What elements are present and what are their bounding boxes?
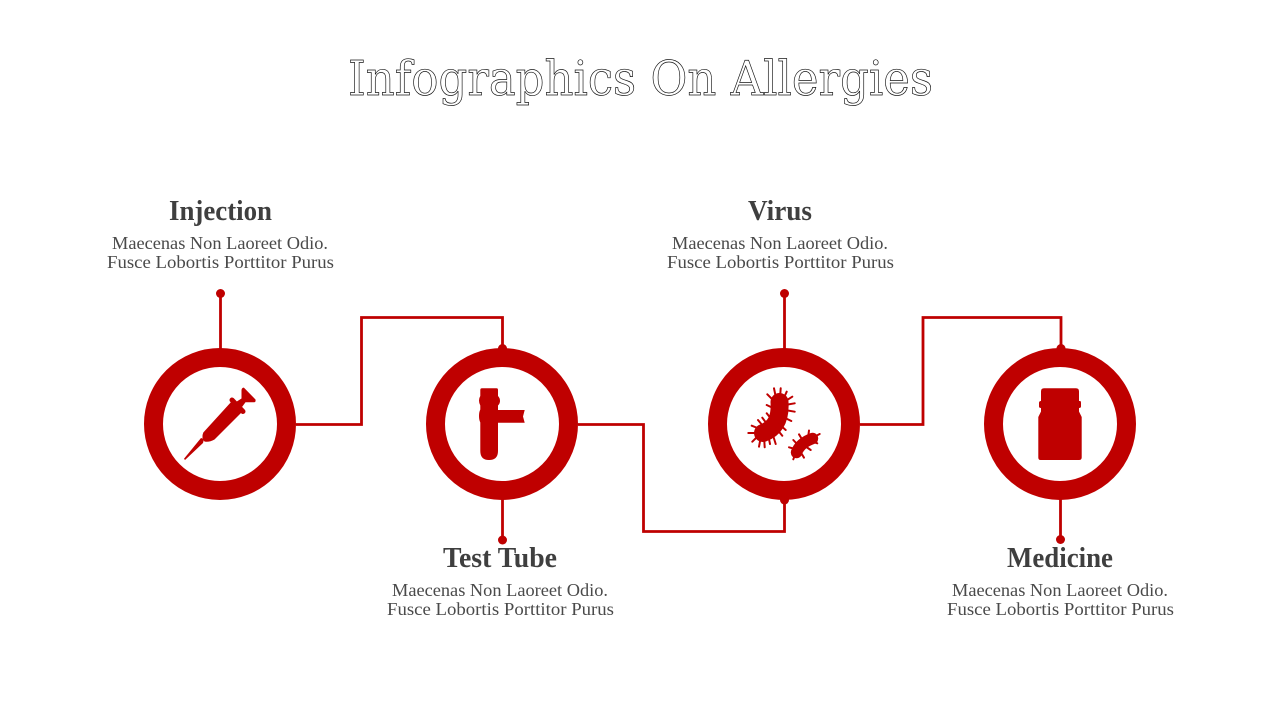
- pin: test tube: [498, 498, 507, 544]
- title: Infographics On Allergies: [348, 51, 933, 107]
- text: medicine description: [947, 580, 1174, 619]
- heading: injection: Injection: [169, 196, 272, 227]
- heading: virus: Virus: [748, 196, 812, 227]
- panel: medicine: [947, 358, 1174, 619]
- text: virus description: Fusce Lobortis Porttitor Purus: [667, 252, 894, 272]
- text: virus description: [667, 233, 894, 272]
- text: injection description: [107, 233, 334, 272]
- connector: virus to medicine: [860, 318, 1066, 424]
- connector: injection to test tube: [296, 318, 507, 424]
- text: virus description: Maecenas Non Laoreet Odio.: [672, 233, 888, 253]
- connector: test tube to virus: [578, 424, 789, 532]
- ring: medicine: [994, 358, 1126, 490]
- icon: test tube: [479, 388, 525, 460]
- text: test tube description: Fusce Lobortis Porttitor Purus: [387, 599, 614, 619]
- text: medicine description: Maecenas Non Laoreet Odio.: [952, 580, 1168, 600]
- large bacterium: [748, 388, 795, 447]
- icon: syringe: [184, 388, 256, 460]
- text: test tube description: [387, 580, 614, 619]
- text: medicine description: Fusce Lobortis Porttitor Purus: [947, 599, 1174, 619]
- heading: medicine: Medicine: [1007, 543, 1113, 574]
- panel: virus: [667, 196, 894, 490]
- panel: injection: [107, 196, 334, 490]
- ring: injection: [154, 358, 286, 490]
- pin: injection: [216, 289, 225, 350]
- heading: test tube: Test Tube: [443, 543, 557, 574]
- panel: test tube: [387, 358, 614, 619]
- icon: medicine bottle: [1038, 388, 1082, 460]
- icon: virus: [748, 388, 820, 459]
- text: test tube description: Maecenas Non Laoreet Odio.: [392, 580, 608, 600]
- ring: test tube: [436, 358, 568, 490]
- pin: virus: [780, 289, 789, 350]
- ring: virus: [718, 358, 850, 490]
- text: injection description: Maecenas Non Laoreet Odio.: [112, 233, 328, 253]
- small bacterium: [789, 430, 820, 459]
- pin: medicine: [1056, 498, 1065, 544]
- text: injection description: Fusce Lobortis Porttitor Purus: [107, 252, 334, 272]
